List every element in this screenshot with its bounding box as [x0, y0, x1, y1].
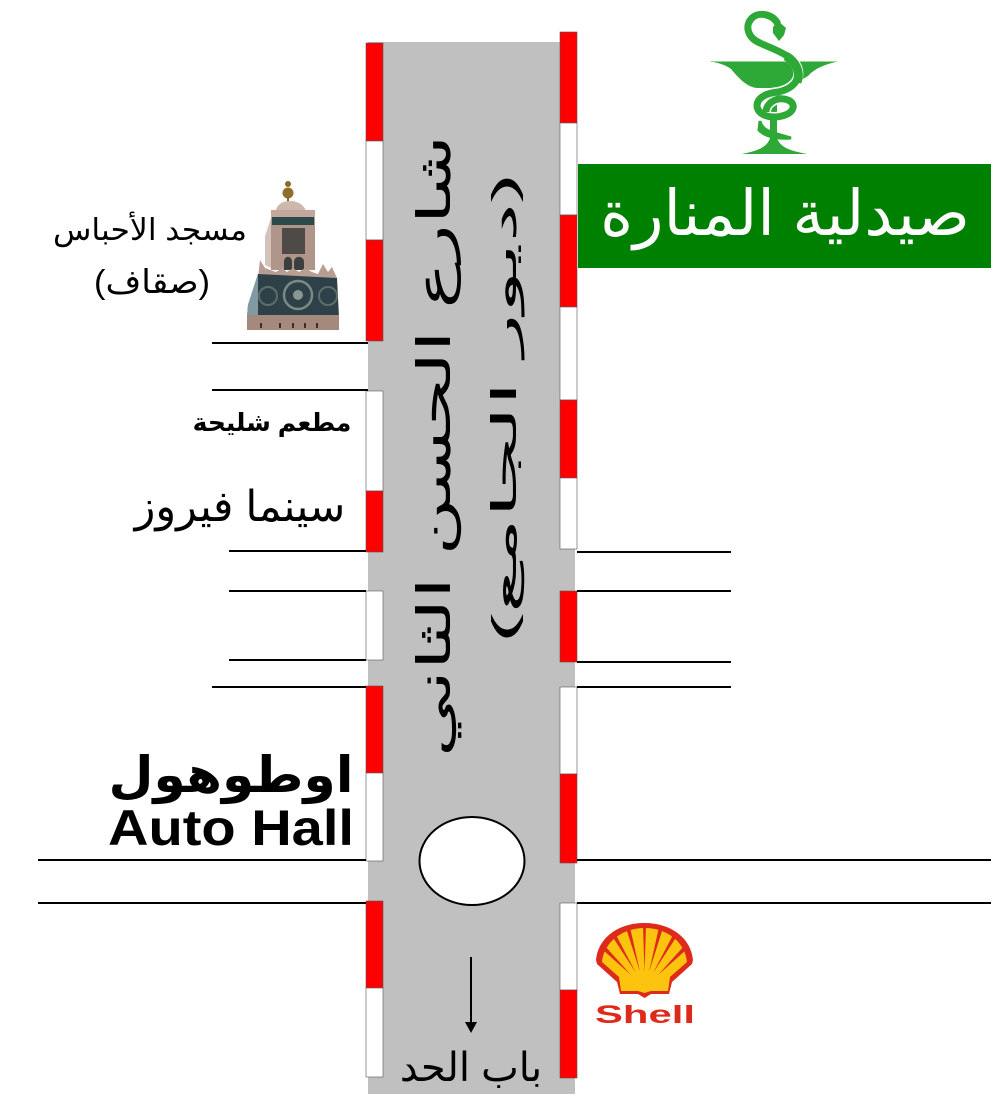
street name subtitle: Dior Jamaa: (ديور الجامع) — [486, 173, 525, 643]
right kerb strips — [560, 32, 577, 1078]
left kerb strips — [366, 43, 383, 1077]
label: Ahbass mosque: مسجد الأحباس — [53, 210, 247, 247]
logo: Auto Hall — [108, 747, 354, 856]
pharmacy sign — [578, 164, 991, 268]
arrow: direction to Bab El Had — [465, 957, 477, 1033]
label: Chliha restaurant: مطعم شليحة — [193, 409, 351, 437]
pharmacy sign: صيدلية المنارة — [600, 179, 970, 250]
road: Hassan II avenue — [368, 42, 575, 1094]
logo: Shell: Shell — [595, 1001, 695, 1029]
label: Cinema Fairouz: سينما فيروز — [133, 483, 345, 532]
logo: Auto Hall: Auto Hall — [108, 800, 354, 856]
side street lines — [38, 343, 991, 903]
street name: Hassan II: شارع الحسن الثاني — [408, 135, 462, 757]
logo: Shell — [595, 923, 695, 1029]
label: Sakkaf: (صقاف) — [94, 263, 210, 300]
label: Bab El Had: باب الحد — [400, 1046, 542, 1090]
roundabout — [420, 817, 524, 905]
icon: minaret — [247, 181, 339, 330]
icon: bowl of Hygieia — [711, 14, 838, 154]
logo: Auto Hall: اوطوهول — [108, 747, 354, 805]
